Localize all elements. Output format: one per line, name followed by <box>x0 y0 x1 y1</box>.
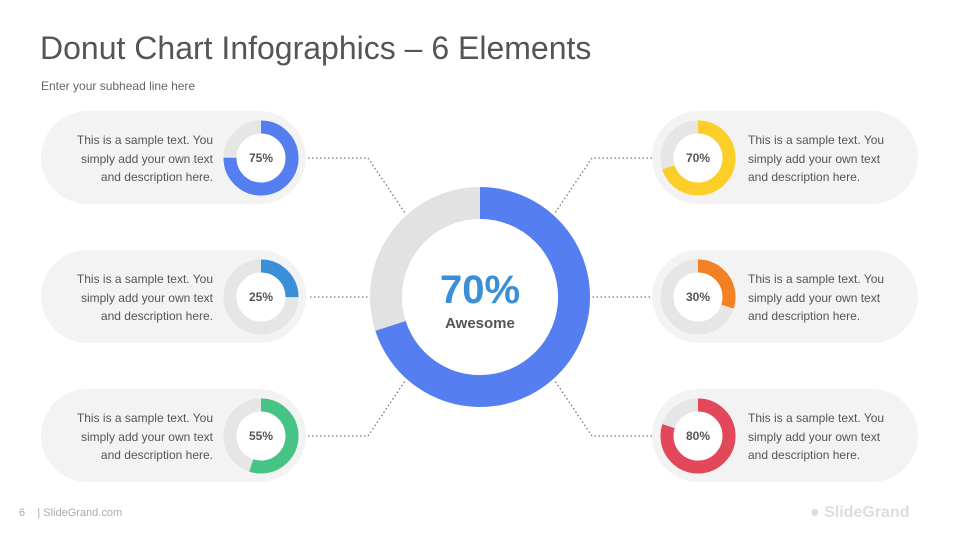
footer: 6 | SlideGrand.com <box>19 507 122 519</box>
big donut <box>386 203 574 391</box>
small donuts: 30% <box>686 290 710 304</box>
big donut: 70% <box>440 268 520 312</box>
text: This is a sample text. You simply add your own text and description here. <box>748 133 884 184</box>
title: Donut Chart Infographics – 6 Elements <box>40 30 591 66</box>
text: This is a sample text. You simply add your own text and description here. <box>77 411 213 462</box>
small donuts: 80% <box>686 429 710 443</box>
small donuts: 70% <box>686 151 710 165</box>
pills <box>41 111 918 482</box>
big donut: Awesome <box>445 315 515 332</box>
text blocks: This is a sample text. You simply add your own text and description here. <box>77 133 213 184</box>
text: This is a sample text. You simply add your own text and description here. <box>748 272 884 323</box>
small donuts: 55% <box>249 429 273 443</box>
small donuts: 75% <box>249 151 273 165</box>
connectors <box>308 158 652 436</box>
text: This is a sample text. You simply add your own text and description here. <box>748 411 884 462</box>
text: This is a sample text. You simply add your own text and description here. <box>77 272 213 323</box>
logo: ● SlideGrand <box>810 504 909 521</box>
small donuts: 25% <box>249 290 273 304</box>
subhead: Enter your subhead line here <box>41 79 195 93</box>
small donuts <box>230 127 729 467</box>
